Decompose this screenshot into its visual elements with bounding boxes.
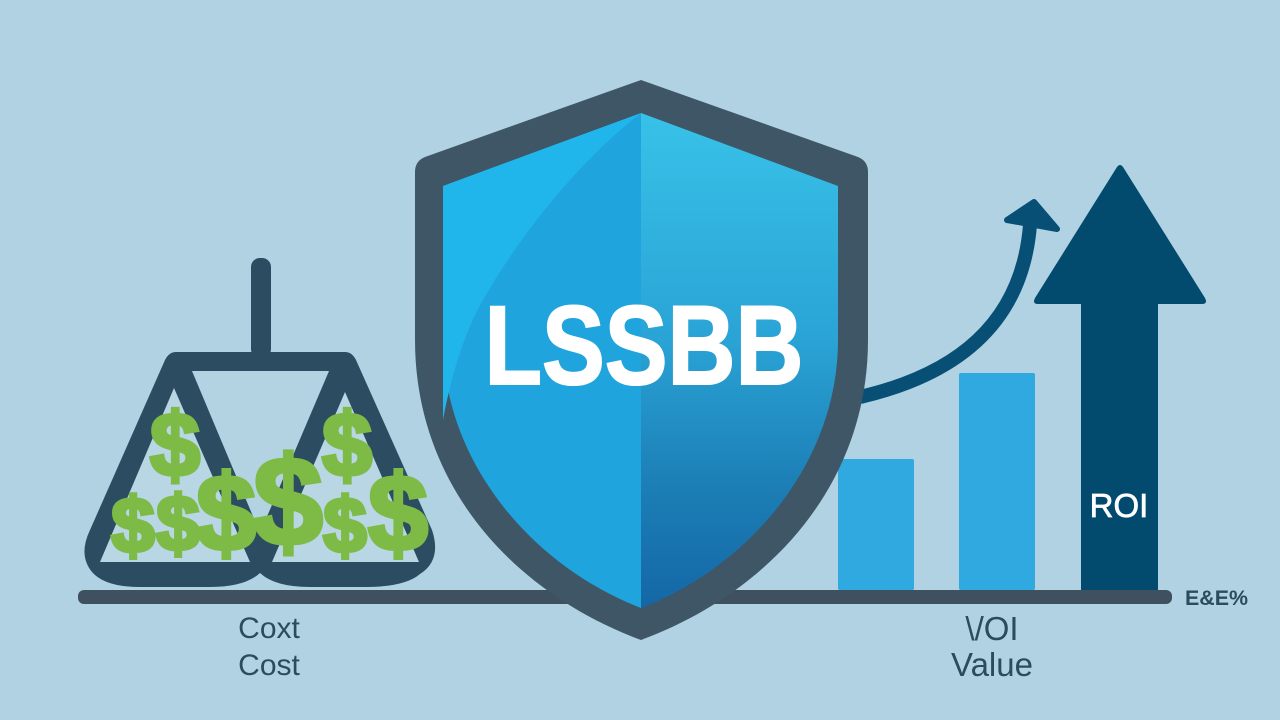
shield left highlight — [443, 113, 641, 420]
label: value pair — [951, 610, 1033, 683]
scale stem — [251, 258, 271, 358]
left pan opening — [100, 388, 250, 562]
label: cost pair: Cost — [238, 649, 301, 682]
dollar signs: $ — [323, 481, 367, 569]
dollar signs: $ — [253, 431, 323, 572]
dollar signs: $ — [368, 452, 428, 573]
shield right half — [641, 113, 838, 608]
shield left half — [443, 113, 641, 608]
bar: tall — [959, 373, 1035, 590]
dollar signs: $ — [156, 479, 200, 567]
centre opening — [192, 371, 329, 533]
ROI label: ROI — [1090, 487, 1148, 524]
label: value pair: \/OI — [965, 610, 1019, 647]
dollar signs: $ — [196, 452, 256, 573]
label: cost pair: Coxt — [238, 612, 301, 645]
label: cost pair — [238, 612, 301, 682]
icon: shield — [415, 80, 868, 640]
ground line — [78, 590, 1172, 604]
arrow: ROI — [1034, 165, 1206, 590]
dollar signs: $ — [322, 396, 372, 496]
right pan opening — [272, 392, 419, 562]
scale frame — [84, 352, 435, 587]
arrow: curved growth — [860, 202, 1057, 397]
shield border — [415, 80, 868, 640]
bar: small — [838, 459, 914, 590]
dollar signs: $ — [111, 481, 155, 569]
label: axis percent: E&E% — [1185, 587, 1248, 610]
dollar signs: $ — [150, 396, 200, 496]
dollar signs — [110, 406, 428, 560]
label: value pair: Value — [951, 646, 1033, 683]
icon: balance scale — [84, 258, 435, 587]
infographic canvas — [78, 80, 1248, 676]
shield title: LSSBB — [484, 283, 804, 408]
